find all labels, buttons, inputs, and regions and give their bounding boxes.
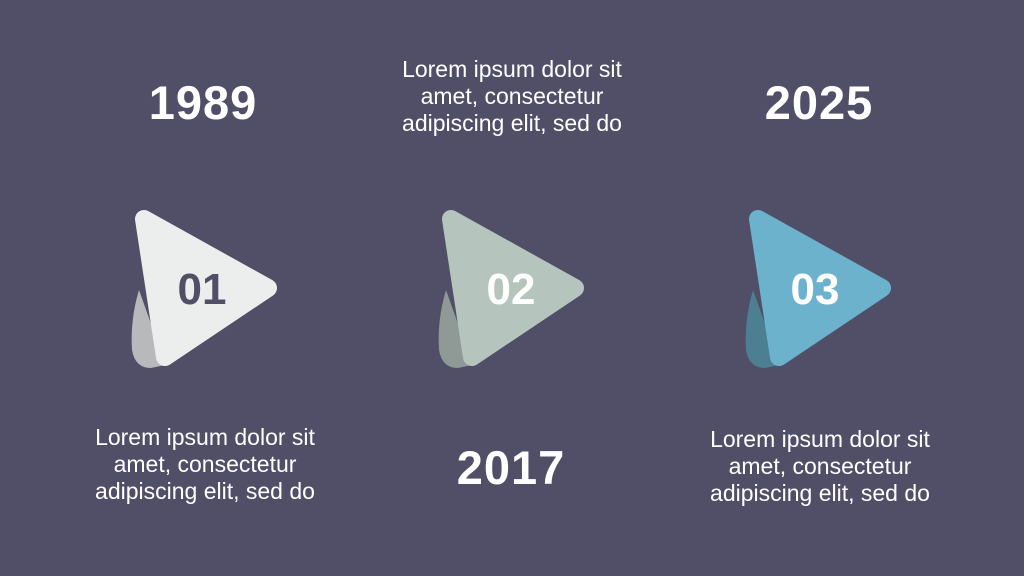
year 2025: 2025 xyxy=(765,76,873,129)
text block top middle: Lorem ipsum dolor sit xyxy=(402,56,622,82)
text block top middle xyxy=(402,56,622,136)
text block bottom left: amet, consectetur xyxy=(114,451,296,477)
text block bottom left xyxy=(95,424,315,504)
text block bottom left: adipiscing elit, sed do xyxy=(95,478,315,504)
text block top middle: amet, consectetur xyxy=(421,83,603,109)
text block top middle: adipiscing elit, sed do xyxy=(402,110,622,136)
text block bottom right: amet, consectetur xyxy=(729,453,911,479)
text block bottom right xyxy=(710,426,930,506)
year 1989: 1989 xyxy=(149,76,257,129)
arrow 02: 02 xyxy=(487,265,535,314)
text block bottom right: adipiscing elit, sed do xyxy=(710,480,930,506)
text block bottom right: Lorem ipsum dolor sit xyxy=(710,426,930,452)
arrow 01 xyxy=(132,219,268,368)
arrow 01: 01 xyxy=(178,265,226,314)
text block bottom left: Lorem ipsum dolor sit xyxy=(95,424,315,450)
arrow 02 xyxy=(439,219,575,368)
arrow 03: 03 xyxy=(791,265,839,314)
year 2017: 2017 xyxy=(457,441,565,494)
arrow 03 xyxy=(746,219,882,368)
